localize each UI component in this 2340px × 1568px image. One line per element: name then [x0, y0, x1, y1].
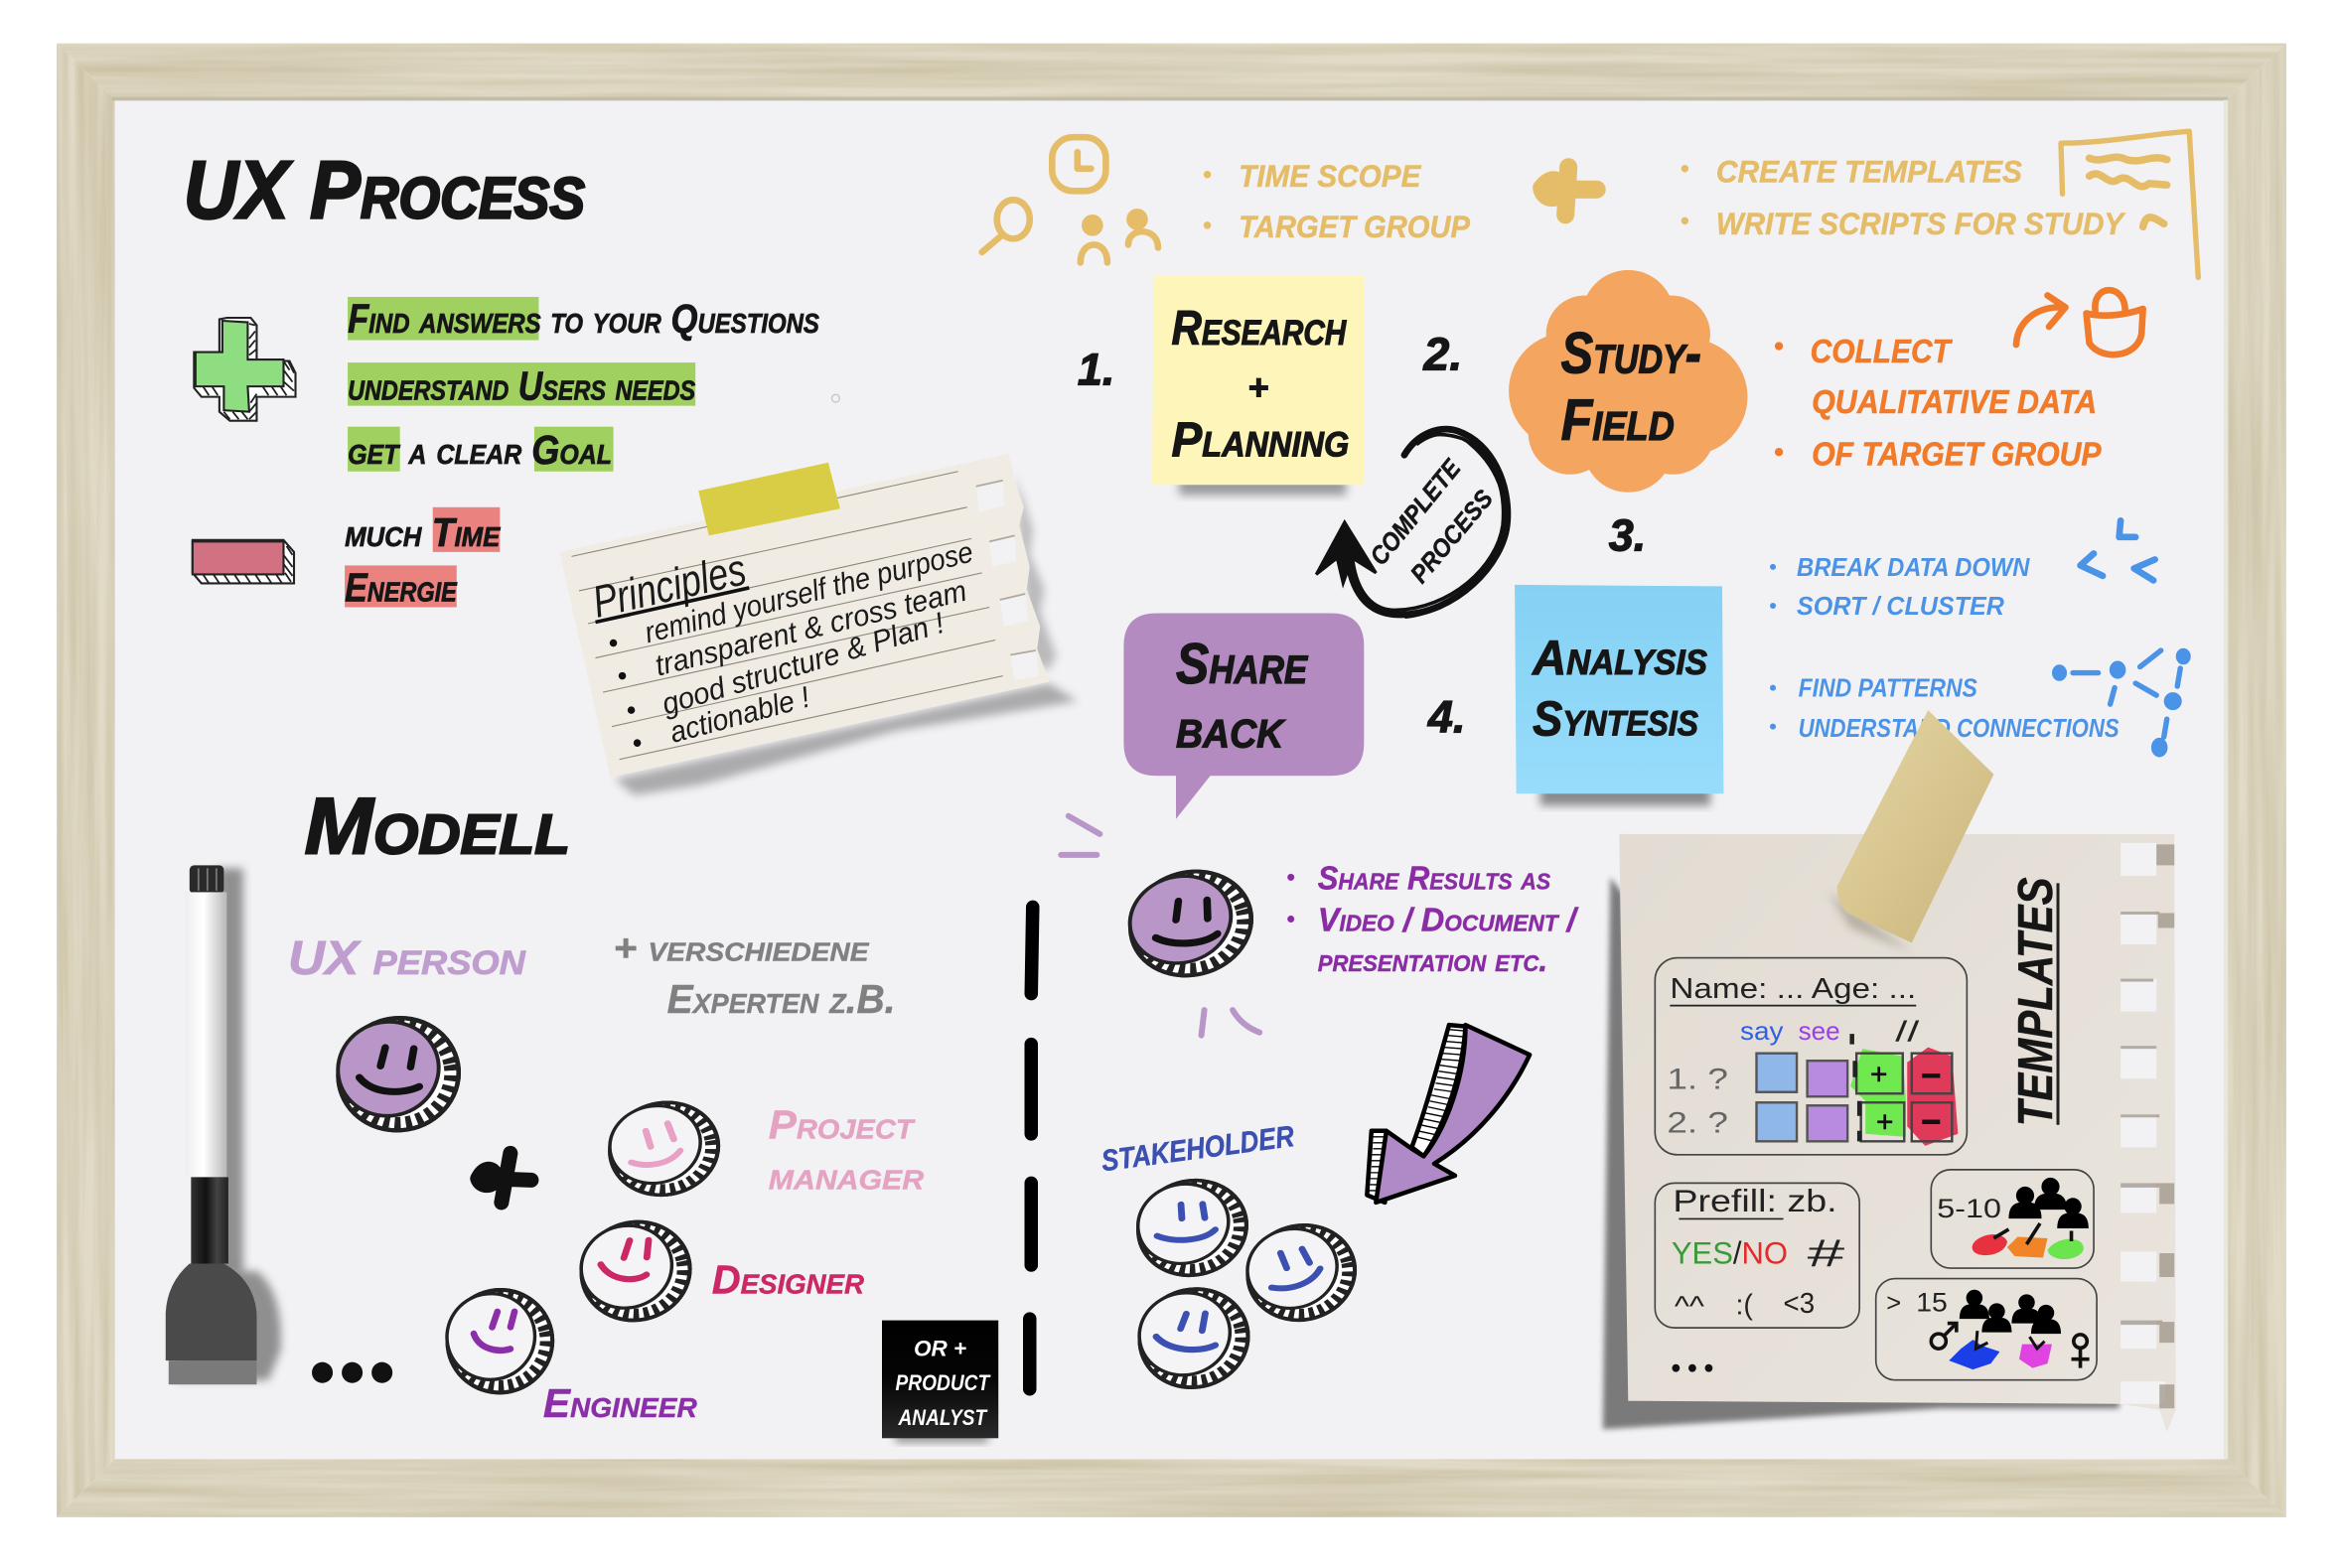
icon: project manager face [603, 1094, 726, 1204]
panel: study field cloud: Study- [1561, 322, 1701, 386]
study field details: QUALITATIVE DATA [1812, 384, 2097, 421]
label: experts: Experten z.B. [667, 976, 896, 1022]
drawbacks list: much Time [345, 509, 502, 555]
panel: black sticky note: OR + [914, 1337, 966, 1361]
benefits list [348, 296, 819, 473]
panel: black sticky note [882, 1321, 998, 1443]
principles bullets: remind yourself the purpose [642, 536, 976, 649]
box: name and age template: // [1895, 1017, 1919, 1049]
curved purple arrow [1367, 1025, 1530, 1203]
box: name and age template: see [1799, 1018, 1840, 1046]
box: group of 5 to 10 [1931, 1170, 2094, 1268]
icon: green plus [194, 318, 296, 421]
research checklist [1204, 158, 1471, 244]
panel: share back speech bubble [1123, 613, 1364, 819]
icon: stakeholder faces [1129, 1171, 1364, 1397]
icon: designer face [572, 1212, 699, 1331]
benefits list: understand Users needs [348, 363, 695, 409]
box: name and age template: 2. ? [1667, 1106, 1728, 1139]
icon: whiteboard marker [166, 865, 281, 1384]
circular arrow: complete process: PROCESS [1405, 485, 1499, 589]
box: prefill template: <3 [1784, 1288, 1815, 1320]
box: group over 15: > [1886, 1290, 1901, 1318]
icon: template sheet [2061, 131, 2198, 277]
box: name and age template: say [1740, 1018, 1784, 1046]
step numbers: 3. [1609, 509, 1646, 560]
research checklist: TARGET GROUP [1239, 209, 1471, 244]
share results details: Share Results as [1318, 860, 1551, 897]
label: project manager: manager [769, 1152, 925, 1198]
circular arrow: complete process [1316, 429, 1508, 618]
template checklist: WRITE SCRIPTS FOR STUDY [1716, 206, 2126, 241]
box: prefill template: :( [1735, 1290, 1753, 1322]
analysis details: FIND PATTERNS [1799, 675, 1977, 703]
panel: black sticky note: ANALYST [898, 1405, 988, 1430]
analysis details: BREAK DATA DOWN [1797, 554, 2030, 582]
panel: principles note [559, 454, 1078, 795]
label: project manager [769, 1101, 925, 1198]
step numbers [1078, 329, 1646, 743]
principles bullets [610, 536, 976, 750]
yellow tape [698, 463, 840, 535]
label: designer: Designer [712, 1257, 865, 1303]
drawbacks list [345, 394, 839, 610]
icon: red minus [193, 540, 294, 583]
box: prefill template [1655, 1183, 1859, 1328]
icon: ellipsis dots [312, 1362, 392, 1383]
panel: share back speech bubble: back [1176, 697, 1286, 761]
analysis details: UNDERSTAND CONNECTIONS [1799, 715, 2120, 743]
panel: study field cloud [1509, 270, 1747, 493]
analysis details [1770, 554, 2120, 743]
share results details: Video / Document / [1318, 902, 1579, 938]
rays around share face [1061, 816, 1259, 1036]
panel: share back speech bubble: Share [1176, 633, 1308, 696]
panel: analysis sticky note: Syntesis [1533, 691, 1698, 747]
panel: analysis sticky note: Analysis [1531, 630, 1707, 685]
box: prefill template: # [1808, 1233, 1845, 1276]
principles bullets: actionable ! [666, 681, 813, 750]
box: group of 5 to 10: 5-10 [1937, 1194, 2001, 1223]
icon: engineer face [438, 1280, 562, 1402]
box: prefill template: Prefill: zb. [1673, 1183, 1837, 1218]
label: ux person: UX person [288, 931, 526, 985]
whiteboard background [115, 100, 2227, 1459]
study field details: OF TARGET GROUP [1812, 437, 2102, 474]
principles bullets: transparent & cross team [652, 575, 970, 682]
template checklist: CREATE TEMPLATES [1716, 153, 2022, 189]
tape [1828, 710, 1993, 952]
circular arrow: complete process: COMPLETE [1365, 454, 1467, 571]
label: experts [614, 927, 896, 1022]
step numbers: 4. [1427, 692, 1466, 743]
principles bullets: good structure & Plan ! [658, 607, 949, 721]
box: prefill template: ^^ [1675, 1291, 1705, 1323]
panel: black sticky note: PRODUCT [896, 1370, 991, 1395]
panel: research sticky note [1152, 276, 1364, 496]
icon: gold plus [1541, 167, 1597, 214]
title: UX Process [184, 143, 585, 235]
step numbers: 1. [1078, 345, 1114, 395]
box: name and age template: 1. ? [1667, 1064, 1728, 1096]
box: group over 15: 15 [1916, 1288, 1948, 1318]
icon: ux person face [330, 1009, 468, 1140]
drawbacks list: Energie [345, 564, 458, 610]
box: group over 15 [1876, 1279, 2097, 1380]
label: engineer: Engineer [543, 1380, 697, 1426]
ellipsis [1672, 1364, 1712, 1372]
share results details: presentation etc. [1318, 942, 1547, 979]
template checklist [1682, 153, 2126, 241]
stakeholder label: STAKEHOLDER [1099, 1120, 1296, 1178]
benefits list: Find answers to your Questions [348, 296, 819, 342]
panel: analysis sticky note [1515, 585, 1723, 805]
panel: templates note [1603, 710, 2176, 1432]
share results details [1287, 860, 1579, 979]
modell heading: Modell [305, 782, 570, 871]
icon: connected dots [2053, 649, 2190, 757]
panel: study field cloud: Field [1561, 388, 1675, 453]
research checklist: TIME SCOPE [1239, 158, 1421, 194]
dashed vertical divider [1030, 907, 1033, 1389]
icon: black plus [478, 1153, 531, 1203]
panel: research sticky note: Research [1172, 300, 1347, 356]
label: experts: + verschiedene [614, 927, 869, 969]
rotated templates label: TEMPLATES [2007, 877, 2063, 1126]
panel: research sticky note: + [1247, 367, 1268, 408]
torn edge holes [2121, 843, 2165, 1404]
box: name and age template: Name: ... Age: ... [1670, 973, 1916, 1005]
analysis details: SORT / CLUSTER [1797, 593, 2004, 621]
study field details: COLLECT [1811, 334, 1953, 370]
top icons: clock, magnifier, people [982, 137, 1158, 262]
icon: break down arrows [2081, 520, 2155, 580]
box: name and age template [1655, 958, 1967, 1155]
icon: share face [1118, 858, 1263, 989]
icon: arrow and bag [2016, 290, 2143, 355]
step numbers: 2. [1422, 329, 1462, 380]
heading: principles: Principles [588, 543, 751, 628]
box: prefill template: YES/NO [1672, 1235, 1788, 1271]
panel: research sticky note: Planning [1172, 412, 1349, 468]
benefits list: get a clear Goal [348, 427, 612, 473]
label: project manager: Project [769, 1101, 917, 1147]
study field details [1775, 334, 2102, 474]
